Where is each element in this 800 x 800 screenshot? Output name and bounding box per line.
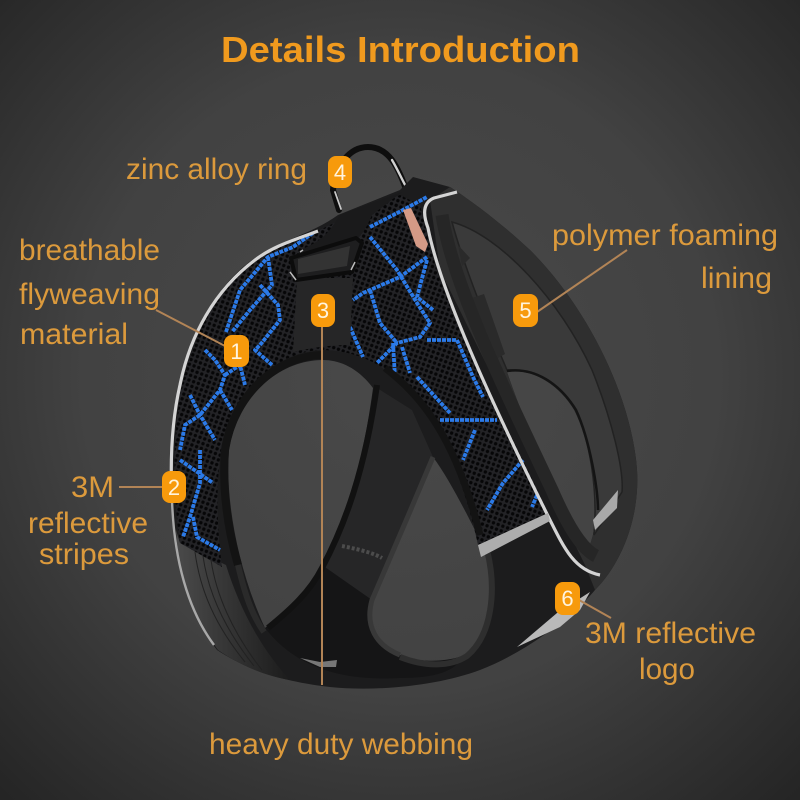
leader: 3 bbox=[321, 326, 323, 685]
central strap fill bbox=[322, 388, 433, 600]
icon: metal D-ring bbox=[333, 147, 410, 210]
lining inner webbing detail bbox=[458, 245, 505, 358]
right wing rim bbox=[430, 187, 637, 590]
buckle metal highlights bbox=[290, 250, 355, 280]
label: breathable flyweaving material: breathable bbox=[19, 234, 160, 267]
badge 6: 6 bbox=[561, 586, 574, 611]
label: breathable flyweaving material: flyweaving bbox=[19, 278, 160, 311]
label: 3M reflective logo: 3M reflective bbox=[585, 617, 756, 650]
label: 3M reflective stripes: stripes bbox=[39, 538, 129, 571]
label: 3M reflective logo bbox=[585, 617, 756, 686]
orange clip bbox=[403, 208, 428, 252]
inner slider strap bbox=[298, 246, 350, 274]
badge 4: 4 bbox=[334, 160, 346, 185]
title: Details Introduction bbox=[221, 29, 580, 70]
webbing vertical strap bbox=[293, 278, 353, 352]
webbing shoulder bbox=[296, 192, 402, 262]
badge 1 bbox=[224, 335, 249, 367]
badge 1: 1 bbox=[230, 339, 243, 364]
webbing slider buckle bbox=[291, 238, 362, 280]
stitched seam bbox=[342, 546, 382, 558]
label: breathable flyweaving material: material bbox=[20, 318, 128, 351]
label: breathable flyweaving material bbox=[19, 234, 160, 351]
badge 3 bbox=[311, 294, 335, 327]
reflective piping bbox=[171, 192, 600, 645]
strap base dark zone bbox=[265, 565, 465, 678]
badge 5 bbox=[513, 294, 538, 327]
piping side strip bbox=[442, 215, 596, 556]
badge 2 bbox=[162, 471, 186, 503]
leader: 6 bbox=[579, 600, 611, 618]
label: 3M reflective logo: logo bbox=[639, 653, 695, 686]
label: polymer foaming lining: polymer foaming bbox=[552, 219, 778, 252]
leader: 1 bbox=[156, 310, 225, 346]
leader: 5 bbox=[537, 250, 627, 312]
ribbing on lower-left band bbox=[195, 552, 262, 670]
small printed logo bbox=[300, 658, 337, 667]
harness body bbox=[171, 177, 637, 689]
label: polymer foaming lining bbox=[552, 219, 778, 295]
badge 5: 5 bbox=[519, 298, 532, 323]
badge 6 bbox=[555, 582, 580, 615]
mesh band bbox=[174, 195, 548, 567]
harness product illustration bbox=[171, 147, 637, 689]
label: zinc alloy ring: zinc alloy ring bbox=[126, 153, 307, 186]
leader: 2 bbox=[119, 486, 163, 488]
badge 2: 2 bbox=[168, 475, 180, 500]
badge 3: 3 bbox=[317, 298, 329, 323]
label: polymer foaming lining: lining bbox=[701, 262, 772, 295]
right wing lining bbox=[452, 222, 622, 535]
wing hole top edge bbox=[507, 370, 598, 510]
label: 3M reflective stripes: 3M bbox=[71, 471, 114, 504]
reflective logo bbox=[517, 592, 590, 647]
blue woven pattern: left bbox=[180, 233, 313, 550]
blue woven pattern: right bbox=[350, 197, 537, 510]
badge 4 bbox=[328, 156, 352, 188]
label: 3M reflective stripes: reflective bbox=[28, 507, 148, 540]
hole rims bbox=[224, 355, 492, 664]
label: heavy duty webbing: heavy duty webbing bbox=[209, 728, 473, 761]
label: 3M reflective stripes bbox=[28, 471, 148, 571]
reflective wing patch bbox=[593, 490, 618, 530]
lower-left band bbox=[176, 530, 290, 680]
reflective strip across band bbox=[478, 513, 550, 557]
